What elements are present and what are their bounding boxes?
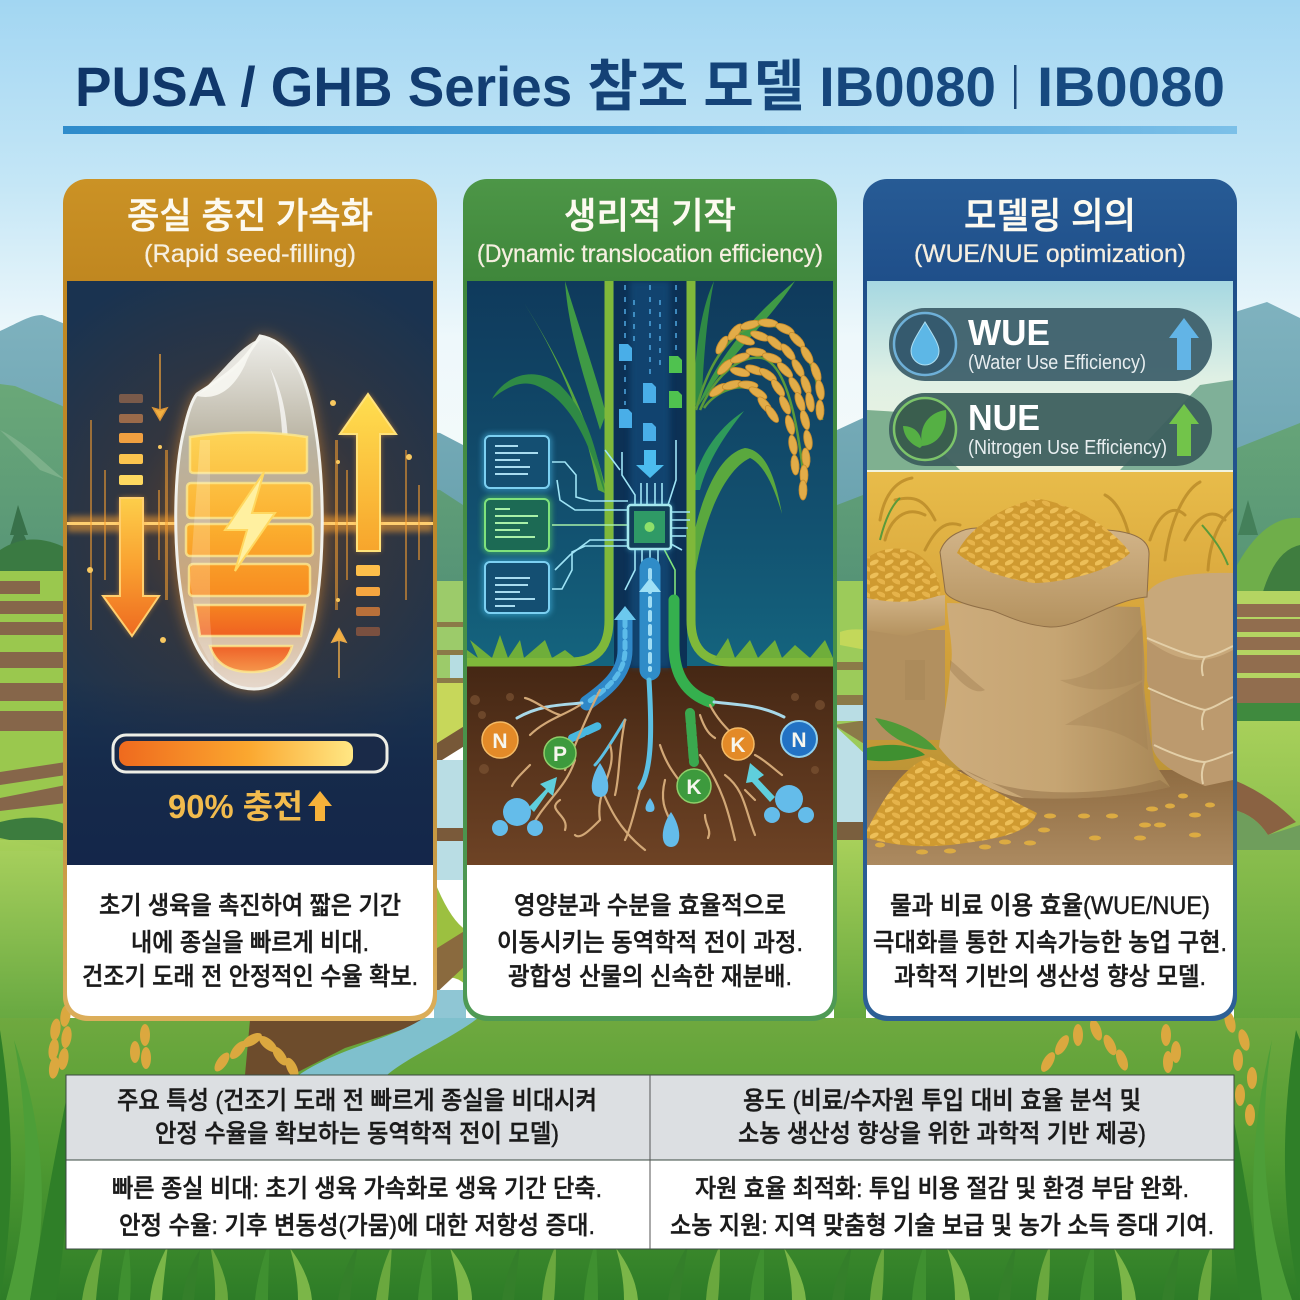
- text block: mechanism description: 영양분과 수분을 효율적으로: [514, 892, 786, 920]
- text block: mechanism description: [467, 865, 833, 1016]
- text block: mechanism description: 이동시키는 동역학적 전이 과정.: [497, 929, 803, 957]
- nutrients and water: N: [492, 730, 508, 753]
- header cell: key characteristics: [117, 1087, 597, 1148]
- panel: rapid seed-filling: [63, 179, 437, 1021]
- header cell: use: [738, 1087, 1146, 1148]
- heading: physiological mechanism: (Dynamic translocation efficiency): [477, 240, 823, 268]
- text block: seed-filling description: [67, 865, 433, 1016]
- nutrients and water: P: [553, 743, 567, 766]
- title: IB0080: [1037, 55, 1225, 118]
- bars: energy level: [87, 354, 412, 678]
- soil: [467, 666, 833, 865]
- right terraces: [1234, 591, 1300, 1041]
- illustration: glowing rice grain: [67, 281, 433, 865]
- text block: modeling description: 극대화를 통한 지속가능한 농업 구현.: [873, 929, 1227, 957]
- panel: physiological mechanism: [463, 179, 837, 1021]
- grass tufts: [467, 635, 833, 658]
- body cell: benefits: [112, 1175, 602, 1240]
- circuit lines: [552, 440, 690, 600]
- header cell: key characteristics: 안정 수율을 확보하는 동역학적 전이 모델): [155, 1120, 559, 1148]
- nutrients and water: K: [686, 776, 702, 799]
- roots: [512, 690, 782, 850]
- battery cells: [186, 432, 313, 672]
- left gap terraces and water: [434, 581, 466, 1035]
- badge: NUE: (Nitrogen Use Efficiency): [968, 437, 1167, 459]
- text block: modeling description: 과학적 기반의 생산성 향상 모델.: [894, 963, 1206, 991]
- illustration: rice plant and data flow: [467, 281, 833, 865]
- nutrients and water: [482, 721, 817, 847]
- river: [245, 1018, 478, 1080]
- code cards: [485, 436, 549, 613]
- progress bar: 90%: [113, 735, 387, 772]
- label: 90% charge: 90% 충전: [168, 788, 303, 825]
- wheat stalks: [880, 478, 1232, 570]
- heading: rapid seed-filling: 종실 충진 가속화: [127, 195, 373, 236]
- left sack: [867, 548, 945, 740]
- heading: physiological mechanism: 생리적 기작: [564, 195, 736, 236]
- header cell: use: 용도 (비료/수자원 투입 대비 효율 분석 및: [743, 1087, 1141, 1115]
- foreground grass: [0, 1018, 1300, 1300]
- ground: [867, 770, 1233, 865]
- nutrient and water channels: [517, 568, 784, 788]
- heading: physiological mechanism: [477, 195, 823, 268]
- header cell: use: 소농 생산성 향상을 위한 과학적 기반 제공): [738, 1120, 1146, 1148]
- icon: rice grain: [176, 336, 322, 689]
- badge: WUE: WUE: [968, 312, 1050, 353]
- rice leaves: [492, 281, 795, 574]
- summary table: [66, 1075, 1234, 1249]
- text block: seed-filling description: 초기 생육을 촉진하여 짧은 기간: [99, 892, 401, 920]
- heading: rapid seed-filling: [127, 195, 373, 268]
- text block: modeling description: 물과 비료 이용 효율(WUE/NUE): [890, 892, 1210, 920]
- stem with data channel: [467, 281, 833, 668]
- energy pulse line: [67, 420, 433, 630]
- rice ears: [44, 1003, 1257, 1126]
- header cell: key characteristics: 주요 특성 (건조기 도래 전 빠르게 종실을 비대시켜: [117, 1087, 597, 1115]
- right gap terraces and water: [834, 581, 866, 1040]
- grass blades: [0, 1030, 1300, 1300]
- illustration: grain sacks: [867, 281, 1233, 865]
- badge: NUE: NUE: [968, 397, 1040, 438]
- nutrients and water: K: [730, 734, 746, 757]
- heading: modeling significance: [914, 195, 1186, 268]
- left terraces: [0, 571, 66, 1040]
- heading: modeling significance: (WUE/NUE optimization): [914, 240, 1186, 268]
- panel: modeling significance: [863, 179, 1237, 1021]
- heading: rapid seed-filling: (Rapid seed-filling): [144, 240, 356, 268]
- text block: seed-filling description: 내에 종실을 빠르게 비대.: [131, 929, 369, 957]
- panicle: [696, 318, 826, 500]
- grain pile and leaves: [867, 718, 1215, 854]
- body cell: benefits: 안정 수율: 기후 변동성(가뭄)에 대한 저항성 증대.: [119, 1212, 595, 1240]
- title: PUSA / GHB Series 참조 모델 IB0080: [75, 55, 996, 118]
- badge: WUE: (Water Use Efficiency): [968, 352, 1146, 374]
- badge: WUE: [889, 308, 1212, 381]
- main sack: [939, 499, 1170, 799]
- badge: NUE: [889, 393, 1212, 466]
- body cell: resources: [670, 1175, 1214, 1240]
- right sack stack: [1144, 573, 1233, 786]
- nutrients and water: N: [791, 729, 807, 752]
- heading: modeling significance: 모델링 의의: [964, 195, 1136, 236]
- arrow: down: [103, 498, 159, 636]
- arrow: up: [340, 394, 396, 551]
- body cell: resources: 자원 효율 최적화: 투입 비용 절감 및 환경 부담 완화.: [695, 1175, 1189, 1203]
- body cell: benefits: 빠른 종실 비대: 초기 생육 가속화로 생육 기간 단축.: [112, 1175, 602, 1203]
- text block: mechanism description: 광합성 산물의 신속한 재분배.: [508, 963, 792, 991]
- tree and bushes: [0, 500, 1300, 595]
- chip: [628, 505, 671, 549]
- body cell: resources: 소농 지원: 지역 맞춤형 기술 보급 및 농가 소득 증대 기여.: [670, 1212, 1214, 1240]
- text block: modeling description: [867, 865, 1233, 1016]
- text block: seed-filling description: 건조기 도래 전 안정적인 수율 확보.: [82, 963, 418, 991]
